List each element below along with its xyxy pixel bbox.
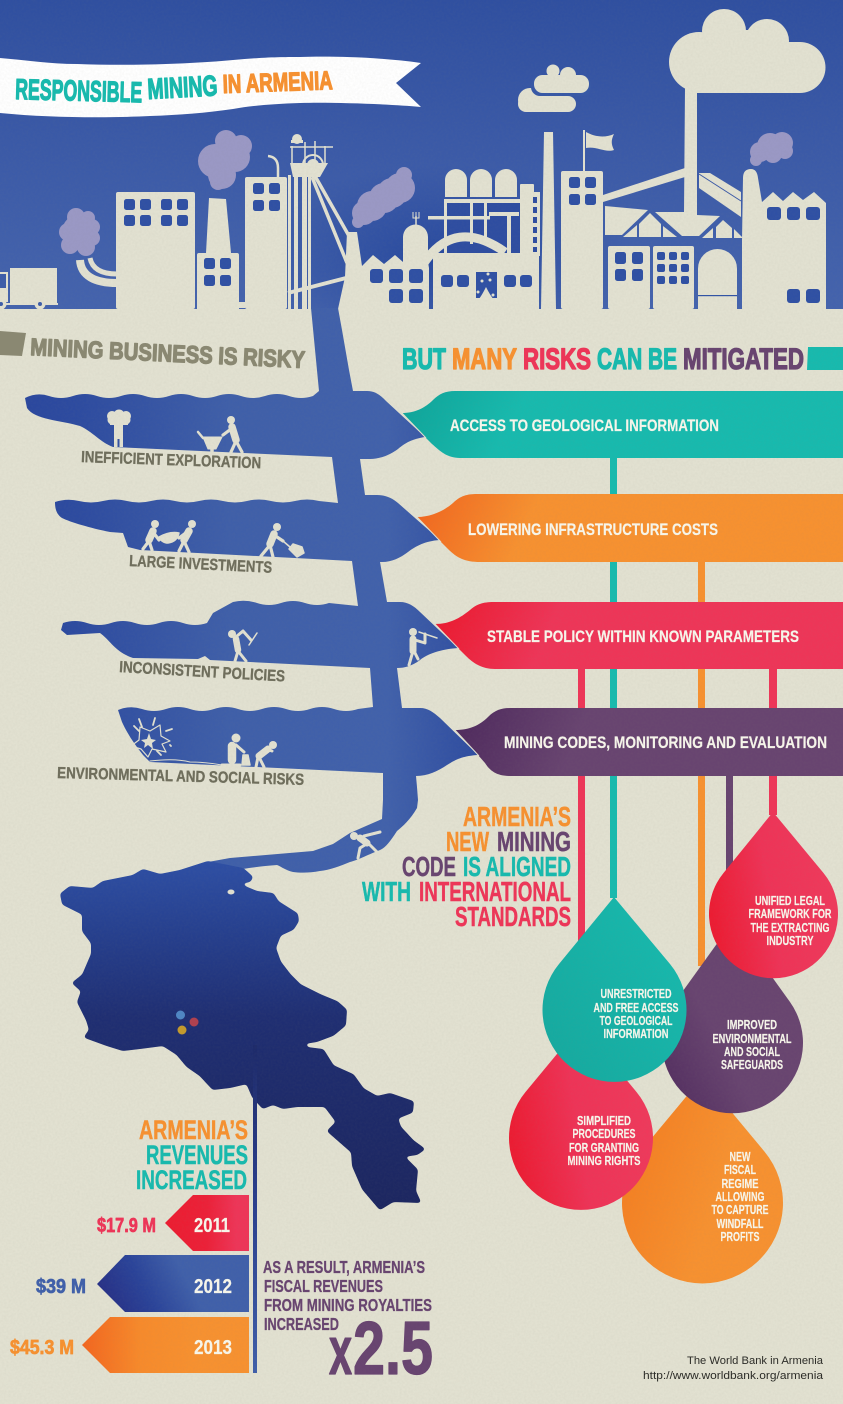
heading: revenues increased: ARMENIA’S [139, 1115, 248, 1145]
ribbon: lowering infrastructure costs: LOWERING INFRASTRUCTURE COSTS [468, 520, 718, 539]
silos [445, 169, 517, 197]
small cloud [518, 64, 591, 112]
callout: new mining code: NEW [446, 826, 489, 857]
drop: new fiscal regime: REGIME [722, 1177, 758, 1191]
big number: 2.5 [353, 1306, 433, 1390]
heading: mining business is risky: MINING BUSINESS IS RISKY [30, 334, 306, 374]
heading: revenues increased: REVENUES [146, 1140, 248, 1170]
big number: x [329, 1313, 352, 1389]
scaffold backdrop [447, 203, 523, 253]
icon: two workers carrying a sack [143, 520, 196, 552]
sky background [0, 0, 843, 309]
factory skyline right [561, 88, 826, 309]
factory building one [116, 192, 195, 309]
callout: new mining code: IS ALIGNED [463, 851, 571, 882]
tall building [239, 156, 287, 309]
text: fiscal revenues result: AS A RESULT, ARMENIA’S [263, 1257, 425, 1277]
roof panels [605, 206, 742, 238]
right factory [742, 169, 826, 309]
scaffold [428, 184, 540, 256]
icon: worker pushing cart [261, 523, 304, 557]
risk label 4: ENVIRONMENTAL AND SOCIAL RISKS [57, 765, 305, 789]
source credit: http://www.worldbank.org/armenia [643, 1370, 824, 1382]
revenue arrow 2013: 2013 [194, 1337, 232, 1359]
title text [15, 65, 333, 109]
text: fiscal revenues result: FISCAL REVENUES [264, 1276, 383, 1296]
title text: RESPONSIBLE [15, 74, 143, 109]
drop: new fiscal regime: ALLOWING [716, 1190, 764, 1204]
drop: new fiscal regime [622, 1077, 783, 1283]
tall stack [541, 132, 556, 309]
arch [424, 237, 505, 263]
risk label 2: LARGE INVESTMENTS [129, 553, 273, 577]
factory skyline left [0, 134, 349, 310]
drop: new fiscal regime: NEW [730, 1150, 751, 1164]
risk label 1: INEFFICIENT EXPLORATION [81, 449, 261, 472]
mine tunnels [25, 308, 478, 873]
revenue arrow 2011 [97, 1195, 249, 1251]
icon: miner with pick [228, 630, 257, 661]
callout: new mining code: WITH [362, 876, 411, 907]
heading: revenues increased: INCREASED [136, 1165, 247, 1195]
callout: new mining code: MINING [497, 826, 571, 857]
drop: unified legal framework: INDUSTRY [766, 934, 814, 948]
drop: improved safeguards: ENVIRONMENTAL [712, 1032, 792, 1046]
low hall [433, 253, 539, 309]
ribbon: access to geological information: ACCESS TO GEOLOGICAL INFORMATION [450, 416, 719, 435]
drop: new fiscal regime: PROFITS [720, 1230, 760, 1244]
heading: but many risks can be mitigated [402, 343, 843, 376]
ribbon: mining codes, monitoring and evaluation [455, 708, 843, 776]
text: fiscal revenues result [263, 1257, 433, 1390]
callout: new mining code: INTERNATIONAL [419, 876, 571, 907]
drop: unrestricted access: INFORMATION [604, 1027, 668, 1041]
heading: but many risks can be mitigated: MANY [452, 343, 517, 376]
revenue arrow 2012: 2012 [194, 1276, 232, 1298]
drop: new fiscal regime: TO CAPTURE [712, 1203, 768, 1217]
title text: MINING [147, 70, 218, 106]
mine headframe [288, 134, 349, 309]
drop: new fiscal regime: FISCAL [724, 1163, 756, 1177]
drop: simplified procedures: MINING RIGHTS [568, 1154, 640, 1168]
connector lines [578, 458, 777, 966]
text: fiscal revenues result: FROM MINING ROYALTIES [264, 1295, 432, 1315]
title banner [0, 57, 421, 117]
revenue arrow 2013 [10, 1317, 249, 1373]
icon: explosion [131, 718, 222, 765]
revenue arrow 2012: $39 M [36, 1276, 86, 1298]
drop: simplified procedures: SIMPLIFIED [577, 1114, 631, 1128]
text: fiscal revenues result: INCREASED [264, 1314, 339, 1334]
callout: new mining code: CODE [402, 851, 456, 882]
big number [329, 1306, 433, 1390]
drop: unrestricted access [542, 897, 687, 1082]
icon: climbing figure [350, 832, 380, 858]
icon: worker with wheelbarrow [198, 416, 242, 452]
drop: unrestricted access: AND FREE ACCESS [594, 1001, 678, 1015]
heading: mining business is risky [0, 331, 306, 374]
revenue arrow 2013: $45.3 M [10, 1337, 74, 1359]
conveyor beam [603, 168, 685, 202]
heading: but many risks can be mitigated: MITIGATED [683, 343, 804, 376]
map of Armenia [60, 861, 424, 1210]
drop: simplified procedures: FOR GRANTING [569, 1141, 639, 1155]
big cloud [669, 9, 826, 93]
source credit: The World Bank in Armenia [687, 1355, 824, 1367]
drop: improved safeguards: AND SOCIAL [724, 1045, 780, 1059]
drop: improved safeguards: SAFEGUARDS [721, 1058, 783, 1072]
drop: improved safeguards: IMPROVED [727, 1018, 777, 1032]
drop: simplified procedures: PROCEDURES [572, 1127, 636, 1141]
icon: gems on map [176, 1010, 198, 1034]
sawtooth building with dome [338, 212, 429, 309]
revenue arrow 2011: 2011 [194, 1215, 230, 1237]
title text: IN ARMENIA [222, 65, 333, 99]
source credit [643, 1355, 824, 1382]
icon: miner at tunnel end [409, 628, 437, 665]
drop: new fiscal regime: WINDFALL [716, 1217, 764, 1231]
lower buildings [608, 246, 737, 309]
flag building [561, 130, 614, 309]
ribbon: stable policy within known parameters [435, 602, 843, 669]
risk label 3: INCONSISTENT POLICIES [119, 659, 286, 686]
ribbon: access to geological information [402, 391, 843, 458]
pipes [80, 258, 117, 283]
icon: tree [107, 410, 131, 447]
chimney building [197, 198, 239, 309]
icon: delivery truck [0, 268, 58, 310]
callout: new mining code [362, 801, 571, 932]
drop: unified legal framework [709, 812, 838, 978]
smoke puffs [59, 130, 793, 256]
factory windows [124, 177, 820, 303]
divider bar from map [253, 1045, 257, 1373]
revenue arrow 2012 [36, 1255, 249, 1312]
factory skyline centre [338, 132, 556, 309]
heading: but many risks can be mitigated: RISKS [523, 343, 591, 376]
heading: but many risks can be mitigated: BUT [402, 343, 446, 376]
drop: simplified procedures [509, 1025, 653, 1210]
callout: new mining code: STANDARDS [455, 901, 571, 932]
callout: new mining code: ARMENIA’S [463, 801, 571, 832]
drop: unrestricted access: UNRESTRICTED [600, 987, 672, 1001]
drop: unrestricted access: TO GEOLOGICAL [600, 1014, 673, 1028]
heading: revenues increased [136, 1115, 248, 1195]
heading: but many risks can be mitigated: CAN BE [597, 343, 677, 376]
slanted conveyor [699, 173, 741, 217]
icon: factory door with fountain [476, 272, 497, 300]
icon: kneeling workers [222, 734, 277, 767]
revenue arrow 2011: $17.9 M [97, 1215, 156, 1237]
ribbon: lowering infrastructure costs [417, 494, 843, 562]
chimney with funnel [655, 88, 720, 236]
drop: improved safeguards [662, 922, 803, 1113]
